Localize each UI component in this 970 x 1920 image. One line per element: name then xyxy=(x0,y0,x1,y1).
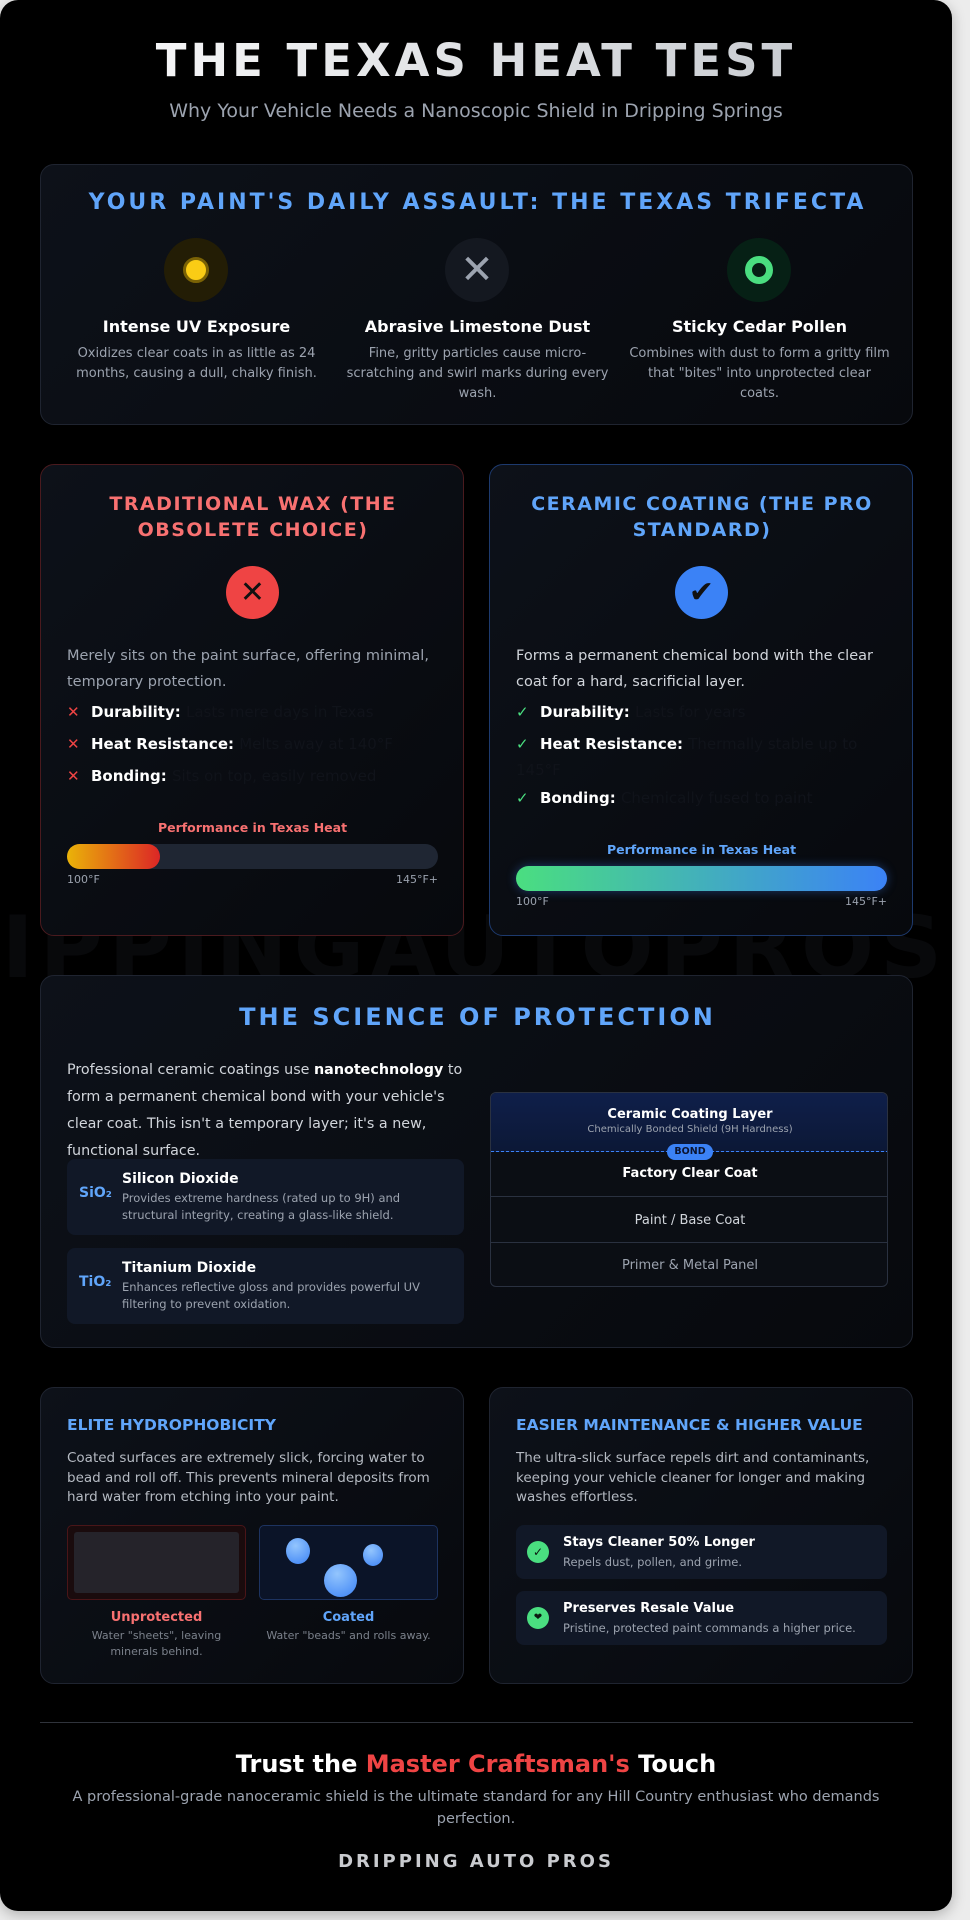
panel: traditional wax: Heat Resistance: Melts away at 140°F xyxy=(91,735,393,753)
item: UV: Intense UV Exposure xyxy=(103,317,290,336)
paragraph: Coated surfaces are extremely slick, forcing water to bead and roll off. This prevents mineral deposits from hard water from etching into your paint. xyxy=(67,1450,430,1505)
performance bar: 100°F xyxy=(516,895,549,908)
benefit: resale: Preserves Resale Value xyxy=(563,1601,734,1616)
icon: check xyxy=(675,566,728,619)
item: dust xyxy=(347,317,608,401)
label unprotected: Unprotected xyxy=(111,1610,202,1625)
chem: silicon dioxide: SiO₂ xyxy=(79,1185,112,1201)
label coated: Water "beads" and rolls away. xyxy=(266,1629,431,1642)
chem: titanium dioxide: Enhances reflective gloss and provides powerful UV filtering to prevent oxidation. xyxy=(122,1280,420,1311)
paragraph: Professional ceramic coatings use nanotechnology to form a permanent chemical bond with your vehicle's clear coat. This isn't a temporary layer; it's a new, functional surface. xyxy=(67,1062,462,1159)
performance bar: Performance in Texas Heat xyxy=(607,842,796,857)
bond badge xyxy=(667,1144,713,1160)
benefit: cleaner: Stays Cleaner 50% Longer xyxy=(563,1535,755,1550)
chem: silicon dioxide: Provides extreme hardness (rated up to 9H) and structural integrity, creating a glass-like shield. xyxy=(122,1191,400,1222)
icon: dust: ✕ xyxy=(460,247,494,293)
paragraph: The ultra-slick surface repels dirt and contaminants, keeping your vehicle cleaner for longer and making washes effortless. xyxy=(516,1450,869,1505)
clear coat xyxy=(491,1153,889,1197)
benefit: resale: Pristine, protected paint commands a higher price. xyxy=(563,1621,856,1635)
ceramic layer: Chemically Bonded Shield (9H Hardness) xyxy=(587,1124,793,1135)
performance bar xyxy=(67,820,438,886)
label unprotected: Water "sheets", leaving minerals behind. xyxy=(92,1629,221,1658)
paint: Paint / Base Coat xyxy=(635,1213,745,1228)
item: UV: Oxidizes clear coats in as little as 24 months, causing a dull, chalky finish. xyxy=(76,346,317,381)
list: Durability: Lasts for years xyxy=(540,703,746,721)
panel: ceramic coating xyxy=(489,464,913,936)
label coated xyxy=(266,1610,431,1642)
label unprotected xyxy=(92,1610,221,1658)
list: Durability: Lasts mere days in Texas xyxy=(91,703,374,721)
primer: Primer & Metal Panel xyxy=(622,1258,758,1273)
item: dust: Fine, gritty particles cause micro-scratching and swirl marks during every wash. xyxy=(347,346,608,401)
benefit: cleaner: ✓ xyxy=(533,1545,543,1559)
panel: ceramic coating: Heat Resistance: Thermally stable up to 145°F xyxy=(516,735,857,779)
panel: traditional wax: ✕ xyxy=(67,767,80,785)
heading: THE SCIENCE OF PROTECTION xyxy=(239,1003,716,1031)
unprotected sample xyxy=(67,1525,246,1600)
benefit: resale xyxy=(516,1591,887,1645)
panel: ceramic coating: ✓ xyxy=(516,735,529,753)
subtitle: Why Your Vehicle Needs a Nanoscopic Shield in Dripping Springs xyxy=(169,100,783,122)
performance bar: 145°F+ xyxy=(396,873,438,886)
label coated: Coated xyxy=(323,1610,374,1625)
panel: maintenance xyxy=(489,1387,913,1684)
list: ✕ xyxy=(67,703,80,721)
paint xyxy=(491,1198,889,1243)
footer text: A professional-grade nanoceramic shield is the ultimate standard for any Hill Country enthusiast who demands perfection. xyxy=(73,1789,879,1827)
chem: titanium dioxide: TiO₂ xyxy=(79,1274,111,1290)
title xyxy=(0,34,952,87)
ceramic layer: Ceramic Coating Layer xyxy=(607,1107,773,1122)
heading: EASIER MAINTENANCE & HIGHER VALUE xyxy=(516,1416,863,1434)
benefit: resale: ❤ xyxy=(534,1612,542,1623)
benefit: cleaner xyxy=(516,1525,887,1579)
panel: science of protection xyxy=(40,975,913,1348)
panel: hydrophobicity xyxy=(40,1387,464,1684)
icon: x xyxy=(226,566,279,619)
description: Forms a permanent chemical bond with the clear coat for a hard, sacrificial layer. xyxy=(516,648,873,690)
icon: dust xyxy=(445,238,509,302)
bond badge: BOND xyxy=(674,1146,706,1157)
icon: x: ✕ xyxy=(240,575,265,610)
item: pollen: Sticky Cedar Pollen xyxy=(672,317,847,336)
icon: sun xyxy=(164,238,228,302)
heading: ELITE HYDROPHOBICITY xyxy=(67,1416,276,1434)
performance bar: 145°F+ xyxy=(845,895,887,908)
title: THE TEXAS HEAT TEST xyxy=(156,34,796,87)
coated sample xyxy=(259,1525,438,1600)
performance bar: Performance in Texas Heat xyxy=(158,820,347,835)
chem: silicon dioxide: Silicon Dioxide xyxy=(122,1171,239,1187)
panel: ceramic coating: ✓ xyxy=(516,789,529,807)
chem: titanium dioxide xyxy=(67,1248,464,1324)
heading: YOUR PAINT'S DAILY ASSAULT: THE TEXAS TRIFECTA xyxy=(89,190,866,215)
item: pollen: Combines with dust to form a gritty film that "bites" into unprotected clear coats. xyxy=(629,346,890,401)
performance bar xyxy=(510,842,892,908)
clear coat: Factory Clear Coat xyxy=(622,1166,758,1181)
description: Merely sits on the paint surface, offering minimal, temporary protection. xyxy=(67,648,429,690)
item: dust: Abrasive Limestone Dust xyxy=(365,317,590,336)
chem: titanium dioxide: Titanium Dioxide xyxy=(122,1260,256,1276)
item: pollen xyxy=(629,317,890,401)
icon: check: ✔ xyxy=(689,575,714,610)
icon: pollen xyxy=(727,238,791,302)
chem: silicon dioxide xyxy=(67,1159,464,1235)
list: ✓ xyxy=(516,703,529,721)
ceramic layer xyxy=(491,1093,889,1152)
panel: traditional wax: Bonding: Sits on top, easily removed xyxy=(91,767,376,785)
benefit: cleaner: Repels dust, pollen, and grime. xyxy=(563,1555,742,1569)
panel: texas trifecta xyxy=(40,164,913,425)
panel: ceramic coating: Bonding: Chemically fused to paint xyxy=(540,789,813,807)
panel: traditional wax xyxy=(40,464,464,936)
heading: CERAMIC COATING (THE PRO STANDARD) xyxy=(531,493,873,541)
heading: TRADITIONAL WAX (THE OBSOLETE CHOICE) xyxy=(109,493,397,541)
footer heading: Trust the Master Craftsman's Touch xyxy=(236,1750,716,1778)
performance bar: 100°F xyxy=(67,873,100,886)
panel: traditional wax: ✕ xyxy=(67,735,80,753)
layer diagram xyxy=(490,1092,888,1287)
item: UV xyxy=(76,317,317,381)
brand: DRIPPING AUTO PROS xyxy=(338,1851,614,1872)
